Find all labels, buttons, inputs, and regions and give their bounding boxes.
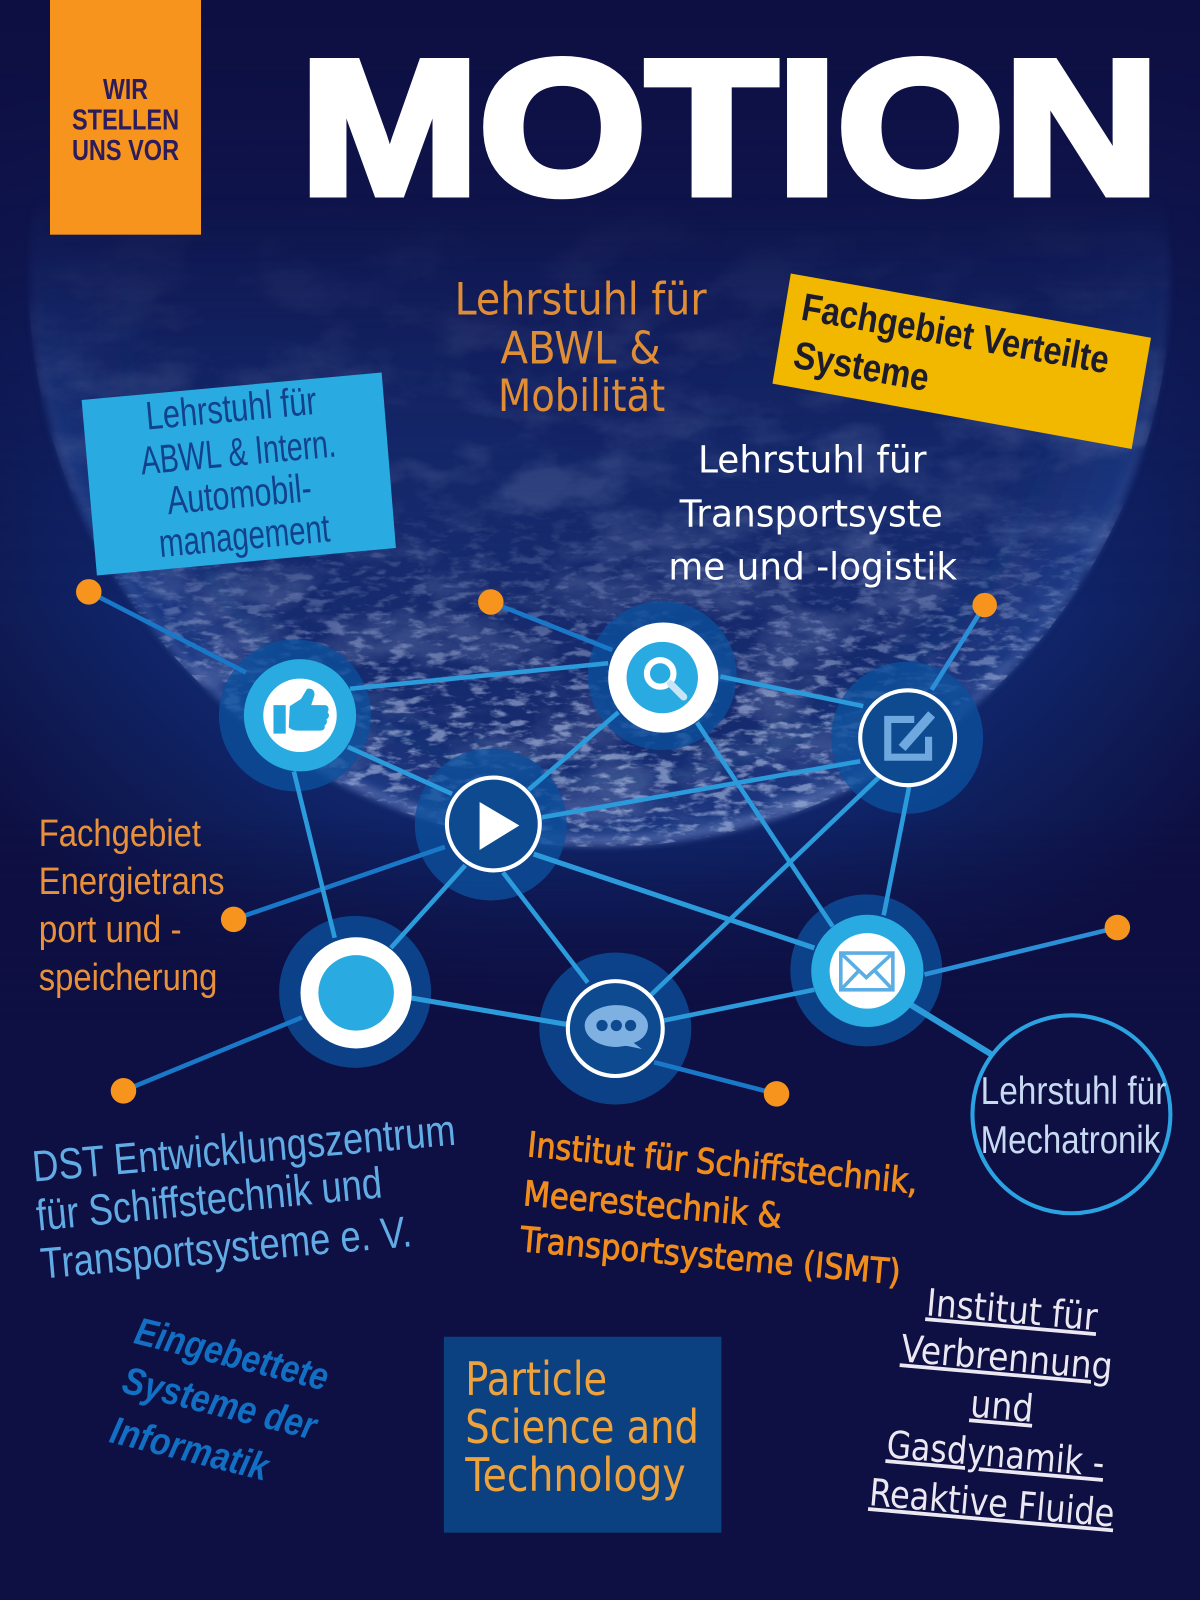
- label box: Fachgebiet Verteilte Systeme: Fachgebiet Verteilte: [798, 286, 1112, 382]
- icon: play: [447, 778, 540, 870]
- node halos: [219, 601, 983, 1105]
- orange tag: [50, 0, 201, 235]
- label box: Particle Science and Technology: Particle: [465, 1352, 607, 1406]
- label: Fachgebiet Energietransport und -speicherung: port und -: [39, 908, 182, 950]
- label box: Lehrstuhl ABWL und Intern. Automobilmanagement: Automobil-: [165, 466, 313, 523]
- label box: Lehrstuhl ABWL und Intern. Automobilmanagement: management: [157, 506, 332, 566]
- label: Eingebettete Systeme der Informatik: Eingebettete: [130, 1310, 333, 1399]
- label: Institut fuer Verbrennung und Gasdynamik: [868, 1280, 1116, 1536]
- label: Eingebettete Systeme der Informatik: Informatik: [106, 1409, 275, 1490]
- label box: Particle Science and Technology: Technology: [464, 1448, 686, 1502]
- label: Institut fuer Verbrennung und Gasdynamik: und: [969, 1381, 1035, 1431]
- label: Institut fuer Schiffstechnik: Institut für Schiffstechnik,: [526, 1125, 920, 1203]
- icon: solid circle: [301, 937, 412, 1048]
- label box: Fachgebiet Verteilte Systeme: [772, 273, 1151, 449]
- icon: mail: [811, 915, 923, 1027]
- icon: search: [608, 622, 718, 733]
- label: Institut fuer Verbrennung und Gasdynamik: Gasdynamik -: [885, 1422, 1106, 1485]
- icon: thumbs up: [244, 659, 356, 771]
- label: DST Entwicklungszentrum: DST Entwicklungszentrum: [30, 1106, 457, 1192]
- label: Lehrstuhl fuer Transportsysteme und -logistik: Lehrstuhl für: [698, 437, 927, 481]
- label: Fachgebiet Energietransport und -speicherung: Fachgebiet: [39, 812, 201, 854]
- label: Fachgebiet Energietransport und -speicherung: Energietrans: [39, 860, 224, 902]
- network diagram: [76, 579, 1130, 1107]
- orange tag: STELLEN: [72, 105, 179, 137]
- label box: Particle Science and Technology: [444, 1337, 721, 1533]
- label: Lehrstuhl ABWL und Mobilitaet: Mobilität: [498, 369, 665, 422]
- label box: Lehrstuhl ABWL und Intern. Automobilmanagement: Lehrstuhl für: [144, 379, 318, 439]
- label: Lehrstuhl fuer Transportsysteme und -logistik: [668, 437, 957, 589]
- label: Lehrstuhl fuer Transportsysteme und -logistik: me und -logistik: [668, 545, 957, 589]
- earth globe: [0, 197, 1200, 944]
- label: Lehrstuhl ABWL und Mobilitaet: [455, 272, 707, 422]
- icon: edit: [860, 690, 955, 785]
- label: Institut fuer Verbrennung und Gasdynamik: Verbrennung: [899, 1326, 1114, 1389]
- orange end points: [76, 579, 1130, 1107]
- label: Fachgebiet Energietransport und -speicherung: speicherung: [39, 956, 217, 998]
- label box: Lehrstuhl ABWL und Intern. Automobilmanagement: ABWL & Intern.: [139, 422, 338, 483]
- connection lines: [89, 592, 1117, 1094]
- label: Institut fuer Schiffstechnik: Meerestechnik &: [522, 1174, 783, 1237]
- label: Institut fuer Schiffstechnik: Transportsysteme (ISMT): [518, 1220, 902, 1293]
- circle label: Lehrstuhl fuer Mechatronik: Mechatronik: [981, 1119, 1161, 1162]
- title: MOTION: [300, 21, 1159, 234]
- circle label: Lehrstuhl fuer Mechatronik: [972, 1015, 1170, 1213]
- label: Lehrstuhl ABWL und Mobilitaet: ABWL &: [501, 321, 661, 374]
- orange tag: UNS VOR: [72, 135, 179, 167]
- label box: Particle Science and Technology: Science and: [465, 1400, 699, 1454]
- circle label: Lehrstuhl fuer Mechatronik: Lehrstuhl für: [981, 1070, 1166, 1113]
- label: DST Entwicklungszentrum: [30, 1106, 457, 1289]
- label box: Lehrstuhl ABWL und Intern. Automobilmanagement: [82, 372, 396, 576]
- label: Institut fuer Schiffstechnik: [518, 1125, 920, 1293]
- label: Institut fuer Verbrennung und Gasdynamik: Institut für: [925, 1280, 1100, 1339]
- label: Lehrstuhl ABWL und Mobilitaet: Lehrstuhl für: [455, 272, 707, 325]
- label box: Fachgebiet Verteilte Systeme: Systeme: [790, 334, 932, 400]
- label: Eingebettete Systeme der Informatik: [106, 1310, 333, 1490]
- label: Institut fuer Verbrennung und Gasdynamik: Reaktive Fluide: [868, 1470, 1116, 1536]
- label: Fachgebiet Energietransport und -speicherung: [39, 812, 224, 998]
- orange tag: WIR: [103, 74, 148, 106]
- icon: chat bubble: [568, 981, 663, 1076]
- label: Eingebettete Systeme der Informatik: Systeme der: [118, 1359, 322, 1449]
- label: DST Entwicklungszentrum: für Schiffstechnik und: [34, 1159, 384, 1241]
- label: Lehrstuhl fuer Transportsysteme und -logistik: Transportsyste: [679, 492, 943, 536]
- label: DST Entwicklungszentrum: Transportsysteme e. V.: [38, 1207, 414, 1289]
